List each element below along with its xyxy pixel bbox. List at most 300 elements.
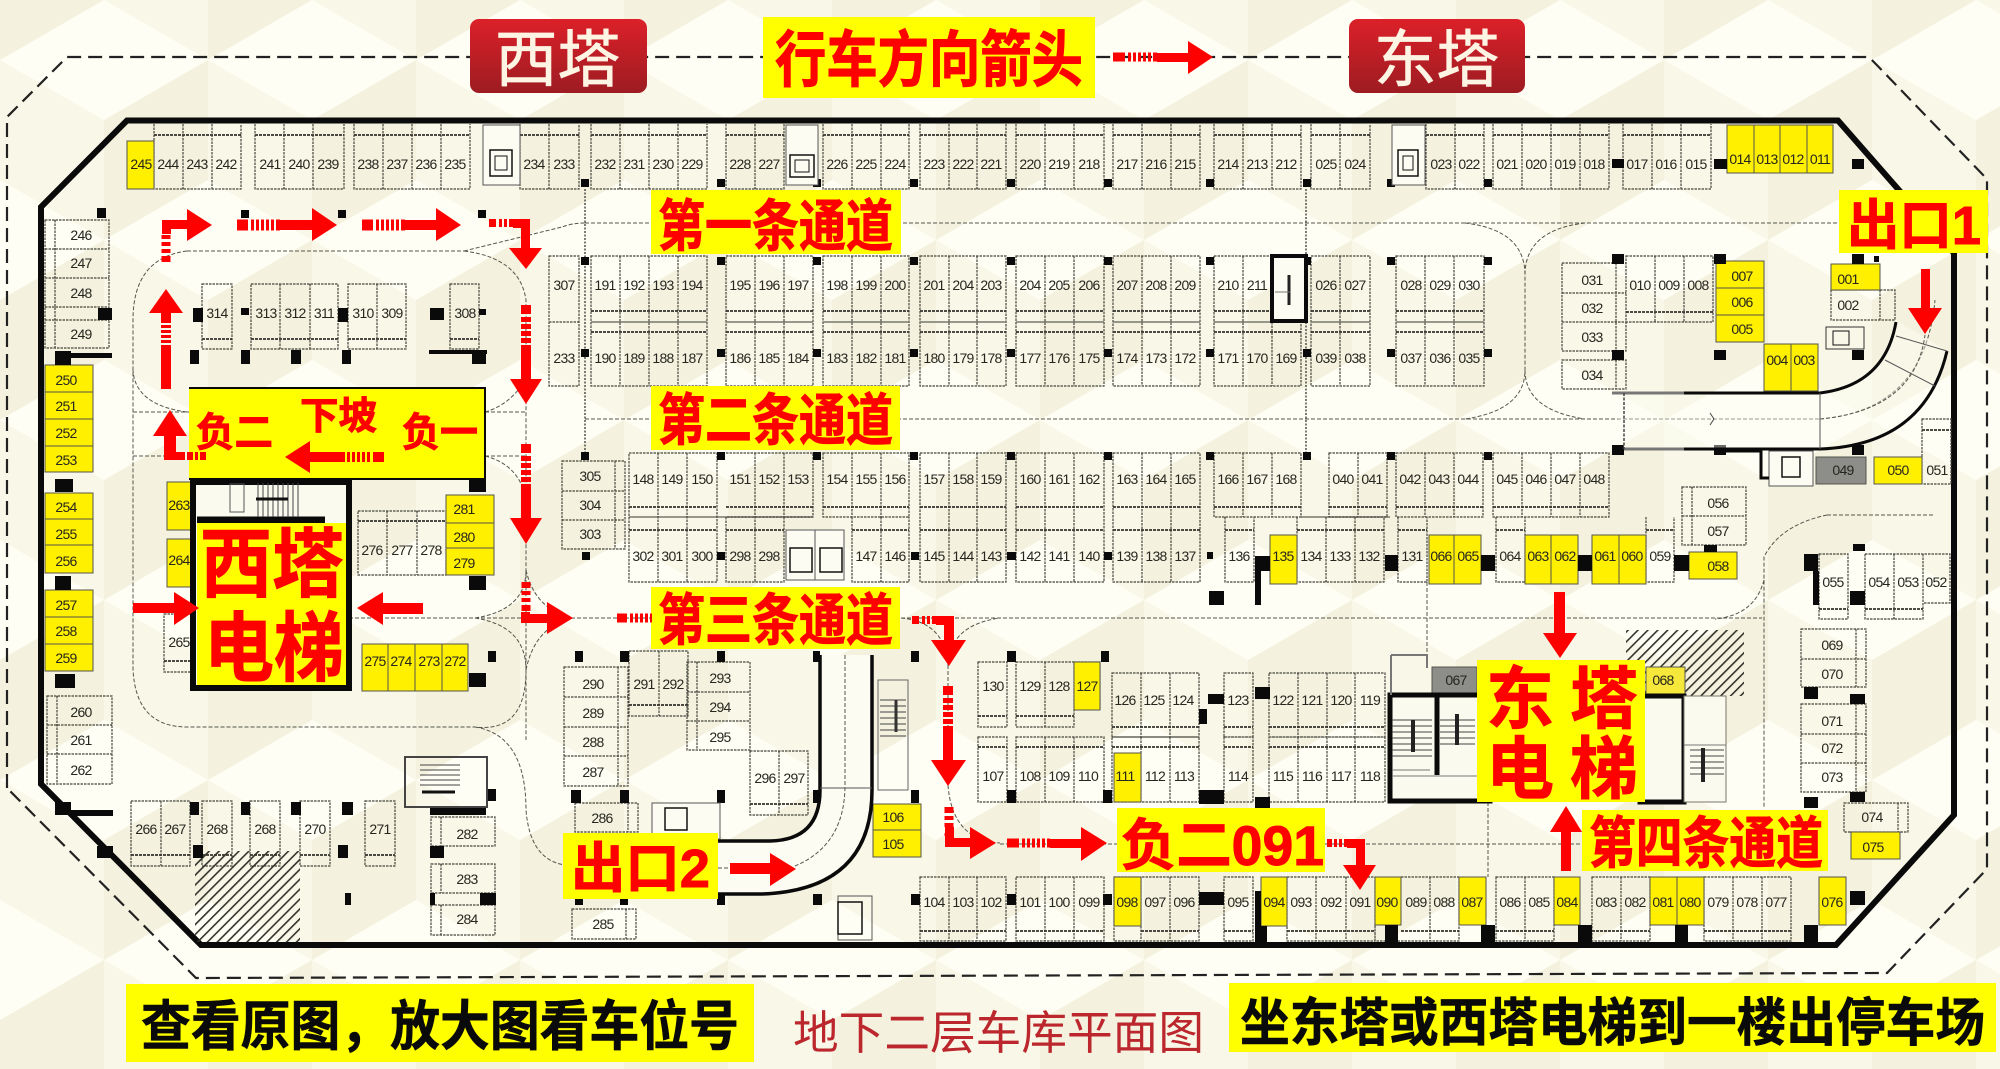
- stall numbers: 254: [55, 499, 78, 515]
- stall numbers: 081: [1652, 894, 1675, 910]
- stall numbers: 176: [1048, 350, 1071, 366]
- stall numbers: 105: [882, 836, 905, 852]
- stall numbers: 061: [1594, 548, 1617, 564]
- stall numbers: 051: [1926, 462, 1949, 478]
- stall numbers: 063: [1527, 548, 1550, 564]
- stall numbers: 086: [1499, 894, 1522, 910]
- stall numbers: 099: [1078, 894, 1101, 910]
- stall numbers: 201: [923, 277, 946, 293]
- stall numbers: 190: [594, 350, 617, 366]
- stall numbers: 005: [1731, 321, 1754, 337]
- stall numbers: 233: [553, 156, 576, 172]
- stall numbers: 127: [1076, 678, 1099, 694]
- stall numbers: 049: [1832, 462, 1855, 478]
- panel: west tower elevator: [197, 523, 346, 692]
- route arrows: [133, 208, 1942, 890]
- stall numbers: 144: [952, 548, 975, 564]
- stall numbers: 060: [1621, 548, 1644, 564]
- stall numbers: 132: [1358, 548, 1381, 564]
- stall numbers: 184: [787, 350, 810, 366]
- stall numbers: 018: [1583, 156, 1606, 172]
- stall numbers: 065: [1457, 548, 1480, 564]
- label: aisle 4: 第四条通道: [1589, 812, 1823, 875]
- stall numbers: 118: [1360, 768, 1381, 784]
- stall numbers: 069: [1821, 637, 1844, 653]
- stall numbers: 139: [1116, 548, 1139, 564]
- stall numbers: 292: [662, 676, 685, 692]
- stall numbers: 040: [1332, 471, 1355, 487]
- stall numbers: 273: [418, 653, 441, 669]
- stall numbers: 295: [709, 729, 732, 745]
- stall numbers: 084: [1556, 894, 1579, 910]
- west tower button: 西塔: [495, 26, 620, 95]
- stall numbers: 275: [364, 653, 387, 669]
- stall numbers: 253: [55, 452, 78, 468]
- stall numbers: 125: [1143, 692, 1166, 708]
- legend: driving direction arrow label: 行车方向箭头: [775, 26, 1083, 94]
- stall numbers: 110: [1078, 768, 1099, 784]
- label: exit 1: 出口1: [1847, 196, 1981, 256]
- stall numbers: 178: [980, 350, 1003, 366]
- stall numbers: 096: [1173, 894, 1196, 910]
- stall numbers: 274: [390, 653, 413, 669]
- stall numbers: 277: [391, 542, 414, 558]
- stall numbers: 124: [1172, 692, 1195, 708]
- stall numbers: 109: [1048, 768, 1071, 784]
- stall numbers: 293: [709, 670, 732, 686]
- stall numbers: 191: [594, 277, 617, 293]
- stall numbers: 122: [1272, 692, 1295, 708]
- stall numbers: 222: [952, 156, 975, 172]
- stall numbers: 004: [1766, 352, 1789, 368]
- stall numbers: 085: [1528, 894, 1551, 910]
- stall numbers: 219: [1048, 156, 1071, 172]
- stall numbers: 072: [1821, 740, 1844, 756]
- stall numbers: 115: [1273, 768, 1294, 784]
- stall numbers: 173: [1145, 350, 1168, 366]
- yellow highlighted stalls: [45, 125, 1922, 926]
- stall numbers: 162: [1078, 471, 1101, 487]
- stall numbers: 044: [1457, 471, 1480, 487]
- west tower core structure: [193, 482, 349, 688]
- stall numbers: 248: [70, 285, 93, 301]
- stall numbers: 193: [652, 277, 675, 293]
- stall numbers: 075: [1862, 839, 1885, 855]
- stall numbers: 028: [1400, 277, 1423, 293]
- stall numbers: 056: [1707, 495, 1730, 511]
- stall numbers: 249: [70, 326, 93, 342]
- footer note: view original image: 查看原图，放大图看车位号: [141, 997, 739, 1057]
- stall numbers: 098: [1116, 894, 1139, 910]
- stall numbers: 297: [783, 770, 806, 786]
- stall numbers: 022: [1458, 156, 1481, 172]
- panel: downhill ramp B1 to B2: 负二: [196, 411, 273, 455]
- panel: east tower elevator: 塔: [1570, 662, 1638, 738]
- stall numbers: 106: [882, 809, 905, 825]
- grey reserved stalls: [1432, 457, 1866, 693]
- stall numbers: 002: [1837, 297, 1860, 313]
- stall numbers: 095: [1227, 894, 1250, 910]
- stall numbers: 215: [1174, 156, 1197, 172]
- stall numbers: 101: [1019, 894, 1042, 910]
- stall numbers: 260: [70, 704, 93, 720]
- stall numbers: 237: [386, 156, 409, 172]
- stall numbers: 129: [1019, 678, 1042, 694]
- stall numbers: 128: [1048, 678, 1071, 694]
- stall numbers: 052: [1925, 574, 1948, 590]
- stall numbers: 023: [1430, 156, 1453, 172]
- stall numbers: 263: [168, 497, 191, 513]
- stall numbers: 313: [255, 305, 278, 321]
- stall numbers: 287: [582, 764, 605, 780]
- stall numbers: 038: [1344, 350, 1367, 366]
- stall numbers: 107: [982, 768, 1005, 784]
- building wall: [41, 120, 1954, 945]
- stall numbers: 221: [980, 156, 1003, 172]
- stall numbers: 046: [1525, 471, 1548, 487]
- stall numbers: 161: [1048, 471, 1071, 487]
- stall numbers: 304: [579, 497, 602, 513]
- stall numbers: 199: [855, 277, 878, 293]
- parking stalls outlines: [45, 124, 1951, 941]
- stall numbers: 250: [55, 372, 78, 388]
- stall numbers: 025: [1315, 156, 1338, 172]
- stall numbers: 283: [456, 871, 479, 887]
- stall numbers: 103: [952, 894, 975, 910]
- stall numbers: 134: [1300, 548, 1323, 564]
- stall numbers: 037: [1400, 350, 1423, 366]
- stall numbers: 308: [454, 305, 477, 321]
- stall numbers: 183: [826, 350, 849, 366]
- stall numbers: 140: [1078, 548, 1101, 564]
- stall numbers: 305: [579, 468, 602, 484]
- stall numbers: 235: [444, 156, 467, 172]
- stall numbers: 234: [523, 156, 546, 172]
- stall numbers: 045: [1496, 471, 1519, 487]
- stall numbers: 100: [1048, 894, 1071, 910]
- stall numbers: 083: [1595, 894, 1618, 910]
- stall numbers: 015: [1685, 156, 1708, 172]
- stall numbers: 214: [1217, 156, 1240, 172]
- stall numbers: 082: [1624, 894, 1647, 910]
- stall numbers: 309: [381, 305, 404, 321]
- stall numbers: 013: [1756, 151, 1779, 167]
- stall numbers: 205: [1048, 277, 1071, 293]
- stall numbers: 032: [1581, 300, 1604, 316]
- stall numbers: 011: [1810, 151, 1831, 167]
- stall numbers: 285: [592, 916, 615, 932]
- structural columns: [55, 159, 1879, 945]
- tower elevators and stair shafts: [405, 125, 1425, 940]
- stall numbers: 030: [1458, 277, 1481, 293]
- stall numbers: 185: [758, 350, 781, 366]
- stall numbers: 130: [982, 678, 1005, 694]
- stall numbers: 120: [1330, 692, 1353, 708]
- stall numbers: 165: [1174, 471, 1197, 487]
- stall numbers: 256: [55, 553, 78, 569]
- stall numbers: 279: [453, 555, 476, 571]
- stall numbers: 276: [361, 542, 384, 558]
- stall numbers: 286: [591, 810, 614, 826]
- stall numbers: 211: [1247, 277, 1268, 293]
- stall numbers: 067: [1445, 672, 1468, 688]
- stall numbers: 024: [1344, 156, 1367, 172]
- stall numbers: 284: [456, 911, 479, 927]
- stall numbers: 186: [729, 350, 752, 366]
- stall numbers: 146: [884, 548, 907, 564]
- stall numbers: 158: [952, 471, 975, 487]
- stall numbers: 008: [1687, 277, 1710, 293]
- stall numbers: 244: [157, 156, 180, 172]
- stall numbers: 172: [1174, 350, 1197, 366]
- stall numbers: 259: [55, 650, 78, 666]
- stall numbers: 242: [215, 156, 238, 172]
- stall numbers: 035: [1458, 350, 1481, 366]
- stall numbers: 210: [1217, 277, 1240, 293]
- stall numbers: 145: [923, 548, 946, 564]
- stall numbers: 036: [1429, 350, 1452, 366]
- stall numbers: 288: [582, 734, 605, 750]
- stall numbers: 156: [884, 471, 907, 487]
- stall numbers: 043: [1428, 471, 1451, 487]
- stall numbers: 166: [1217, 471, 1240, 487]
- stall numbers: 064: [1499, 548, 1522, 564]
- stall numbers: 026: [1315, 277, 1338, 293]
- stall numbers: 280: [453, 529, 476, 545]
- stall numbers: 233: [553, 350, 576, 366]
- stall numbers: 272: [444, 653, 467, 669]
- stall numbers: 174: [1116, 350, 1139, 366]
- stall numbers: 039: [1315, 350, 1338, 366]
- east tower button: [1349, 19, 1525, 95]
- stall numbers: 010: [1629, 277, 1652, 293]
- stall numbers: 229: [681, 156, 704, 172]
- stall numbers: 187: [681, 350, 704, 366]
- east elevator lobby: [1725, 327, 1864, 486]
- stall numbers: 266: [135, 821, 158, 837]
- stall numbers: 213: [1246, 156, 1269, 172]
- stall numbers: 050: [1887, 462, 1910, 478]
- stall numbers: 138: [1145, 548, 1168, 564]
- stall numbers: 112: [1145, 768, 1166, 784]
- stall numbers: 169: [1275, 350, 1298, 366]
- stall numbers: 264: [168, 552, 191, 568]
- stall numbers: 198: [826, 277, 849, 293]
- stall numbers: 019: [1554, 156, 1577, 172]
- stall numbers: 262: [70, 762, 93, 778]
- stall numbers: 142: [1019, 548, 1042, 564]
- stall numbers: 137: [1174, 548, 1197, 564]
- stall numbers: 255: [55, 526, 78, 542]
- stall numbers: 014: [1729, 151, 1752, 167]
- stall numbers: 062: [1554, 548, 1577, 564]
- driveway lines: [133, 189, 1935, 877]
- panel: west tower elevator: 电梯: [204, 607, 344, 692]
- stall numbers: 232: [594, 156, 617, 172]
- stall numbers: 252: [55, 425, 78, 441]
- stall numbers: 301: [661, 548, 684, 564]
- stall numbers: 033: [1581, 329, 1604, 345]
- stall numbers: 141: [1048, 548, 1071, 564]
- west tower button: [470, 19, 647, 95]
- stall numbers: 057: [1707, 523, 1730, 539]
- stall numbers: 225: [855, 156, 878, 172]
- stall numbers: 017: [1626, 156, 1649, 172]
- stall numbers: 148: [632, 471, 655, 487]
- stall numbers: 265: [168, 634, 191, 650]
- stall numbers: 243: [186, 156, 209, 172]
- stall numbers: 163: [1116, 471, 1139, 487]
- stall numbers: 220: [1019, 156, 1042, 172]
- stall numbers: 204: [1019, 277, 1042, 293]
- stall numbers: 227: [758, 156, 781, 172]
- stall numbers: 268: [254, 821, 277, 837]
- panel: east tower elevator: 梯: [1570, 732, 1638, 808]
- panel: west tower elevator: 西塔: [200, 523, 344, 608]
- stall numbers: 155: [855, 471, 878, 487]
- stall numbers: 240: [288, 156, 311, 172]
- stall numbers: 224: [884, 156, 907, 172]
- stall numbers: 091: [1349, 894, 1372, 910]
- stall numbers: [55, 151, 1949, 932]
- stall numbers: 218: [1078, 156, 1101, 172]
- stall numbers: 009: [1658, 277, 1681, 293]
- stall numbers: 092: [1320, 894, 1343, 910]
- east tower core structure: [1390, 655, 1726, 802]
- stall numbers: 074: [1861, 809, 1884, 825]
- stall numbers: 007: [1731, 268, 1754, 284]
- stall numbers: 251: [55, 398, 78, 414]
- stall numbers: 047: [1554, 471, 1577, 487]
- stall numbers: 097: [1144, 894, 1167, 910]
- panel: east tower elevator: [1477, 660, 1645, 808]
- stall numbers: 150: [691, 471, 714, 487]
- stall numbers: 217: [1116, 156, 1139, 172]
- stall numbers: 282: [456, 826, 479, 842]
- stall numbers: 111: [1115, 768, 1136, 784]
- stall numbers: 149: [661, 471, 684, 487]
- stall numbers: 238: [357, 156, 380, 172]
- stall numbers: 170: [1246, 350, 1269, 366]
- stall numbers: 029: [1429, 277, 1452, 293]
- stall numbers: 197: [787, 277, 810, 293]
- stall numbers: 257: [55, 597, 78, 613]
- stall numbers: 312: [284, 305, 307, 321]
- stall numbers: 077: [1765, 894, 1788, 910]
- stall numbers: 200: [884, 277, 907, 293]
- stall numbers: 114: [1228, 768, 1249, 784]
- stall numbers: 079: [1707, 894, 1730, 910]
- stall numbers: 298: [729, 548, 752, 564]
- stall numbers: 241: [259, 156, 282, 172]
- stall numbers: 231: [623, 156, 646, 172]
- label: aisle 3: 第三条通道: [658, 589, 893, 652]
- stall numbers: 203: [980, 277, 1003, 293]
- label: stall B2-091: 负二091: [1121, 814, 1324, 877]
- east tower button: 东塔: [1374, 26, 1499, 95]
- stall numbers: 126: [1114, 692, 1137, 708]
- label: exit 2: 出口2: [571, 839, 710, 899]
- stall numbers: 131: [1401, 548, 1424, 564]
- stall numbers: 271: [369, 821, 392, 837]
- stall numbers: 121: [1301, 692, 1324, 708]
- stall numbers: 160: [1019, 471, 1042, 487]
- stall numbers: 289: [582, 705, 605, 721]
- stall numbers: 311: [314, 305, 335, 321]
- stall numbers: 020: [1525, 156, 1548, 172]
- stall numbers: 154: [826, 471, 849, 487]
- stall numbers: 290: [582, 676, 605, 692]
- hatched plant areas: [195, 630, 1744, 942]
- stall numbers: 116: [1302, 768, 1323, 784]
- stall numbers: 153: [787, 471, 810, 487]
- panel: east tower elevator: 东: [1486, 662, 1554, 738]
- stall numbers: 182: [855, 350, 878, 366]
- stall numbers: 073: [1821, 769, 1844, 785]
- stall numbers: 042: [1399, 471, 1422, 487]
- stall numbers: 054: [1868, 574, 1891, 590]
- stall numbers: 076: [1821, 894, 1844, 910]
- stall numbers: 204: [952, 277, 975, 293]
- stall numbers: 102: [980, 894, 1003, 910]
- stall numbers: 093: [1290, 894, 1313, 910]
- panel: east tower elevator: 电: [1486, 732, 1554, 808]
- stall numbers: 239: [317, 156, 340, 172]
- stall numbers: 006: [1731, 294, 1754, 310]
- stall numbers: 188: [652, 350, 675, 366]
- stall numbers: 195: [729, 277, 752, 293]
- stall numbers: 281: [453, 501, 476, 517]
- stall numbers: 164: [1145, 471, 1168, 487]
- stall numbers: 167: [1246, 471, 1269, 487]
- stall numbers: 179: [952, 350, 975, 366]
- stall numbers: 206: [1078, 277, 1101, 293]
- plan title: 地下二层车库平面图: [793, 1007, 1204, 1059]
- stall numbers: 180: [923, 350, 946, 366]
- stall numbers: 113: [1174, 768, 1195, 784]
- east exit ramp: [1612, 320, 1947, 449]
- stall numbers: 192: [623, 277, 646, 293]
- stall numbers: 226: [826, 156, 849, 172]
- stall numbers: 123: [1227, 692, 1250, 708]
- stall numbers: 303: [579, 526, 602, 542]
- stall numbers: 267: [164, 821, 187, 837]
- stall numbers: 157: [923, 471, 946, 487]
- stall numbers: 053: [1897, 574, 1920, 590]
- stall numbers: 207: [1116, 277, 1139, 293]
- stall numbers: 302: [632, 548, 655, 564]
- stall numbers: 117: [1331, 768, 1352, 784]
- stall numbers: 298: [758, 548, 781, 564]
- stall numbers: 031: [1581, 272, 1604, 288]
- stall numbers: 181: [884, 350, 907, 366]
- stall numbers: 212: [1275, 156, 1298, 172]
- stall numbers: 177: [1019, 350, 1042, 366]
- stall numbers: 194: [681, 277, 704, 293]
- stall numbers: 152: [758, 471, 781, 487]
- label: aisle 1: 第一条通道: [658, 195, 893, 258]
- panel: downhill ramp B1 to B2: [189, 388, 485, 479]
- stall numbers: 133: [1329, 548, 1352, 564]
- stall numbers: 135: [1272, 548, 1295, 564]
- legend arrow: [1113, 41, 1213, 74]
- stall numbers: 087: [1461, 894, 1484, 910]
- stall numbers: 168: [1275, 471, 1298, 487]
- stall numbers: 300: [691, 548, 714, 564]
- stall numbers: 258: [55, 623, 78, 639]
- stall numbers: 078: [1736, 894, 1759, 910]
- stall numbers: 209: [1174, 277, 1197, 293]
